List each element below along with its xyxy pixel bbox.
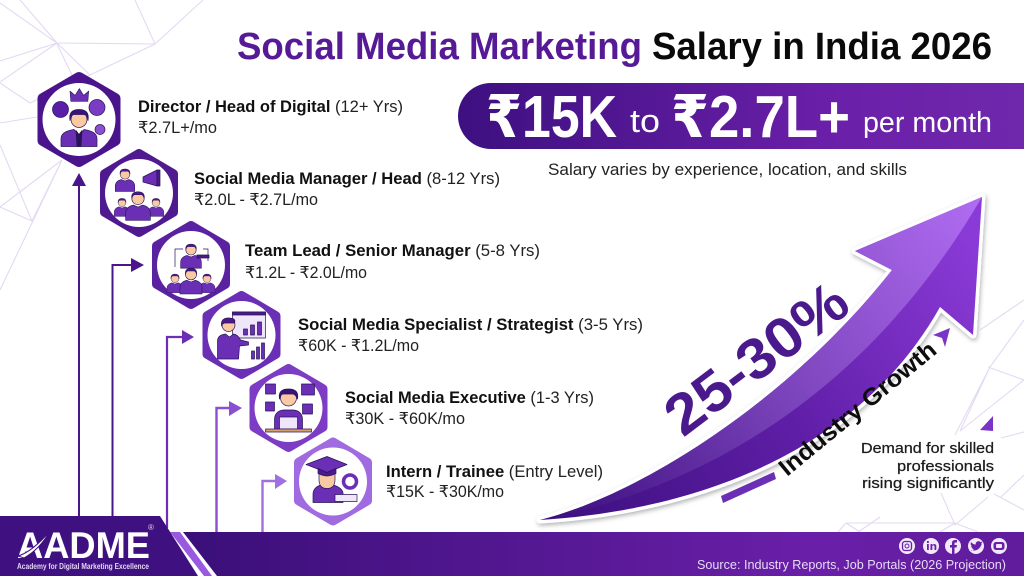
icon: small triangle — [933, 328, 950, 347]
hexagon badge — [42, 78, 116, 162]
hexagon badge — [299, 442, 367, 520]
role label: Social Media Executive (1-3 Yrs) — [345, 388, 594, 407]
hexagon badge — [208, 296, 276, 374]
hexagon badge — [254, 369, 322, 447]
salary: ₹30K - ₹60K/mo — [345, 410, 465, 428]
banner note: Salary varies by experience, location, and skills — [548, 160, 907, 179]
salary range banner: ₹15K — [486, 84, 617, 150]
role label: Intern / Trainee (Entry Level) — [386, 462, 603, 481]
title: Social Media Marketing — [237, 26, 642, 68]
logo: AADME — [17, 525, 150, 566]
salary: ₹1.2L - ₹2.0L/mo — [245, 264, 367, 282]
arrow: to director — [72, 173, 86, 517]
role label: Social Media Specialist / Strategist (3-5 Yrs) — [298, 315, 643, 334]
icon: corner triangle — [980, 416, 993, 431]
salary: ₹60K - ₹1.2L/mo — [298, 337, 419, 355]
tagline: Academy for Digital Marketing Excellence — [17, 561, 149, 571]
demand note: rising significantly — [862, 475, 995, 492]
hexagon badge — [157, 226, 225, 304]
salary range banner — [458, 83, 1024, 150]
footer band — [0, 516, 1024, 576]
big growth arrow — [540, 197, 982, 520]
icon: linkedin — [923, 538, 939, 554]
arrow: to executive — [262, 474, 287, 532]
light purple stripe — [170, 532, 212, 576]
icon: twitter — [968, 538, 984, 554]
panel: team lead — [157, 226, 540, 304]
demand note — [861, 440, 995, 492]
social icons — [899, 538, 1007, 554]
demand note: professionals — [897, 458, 994, 475]
title — [237, 26, 992, 68]
panel: specialist — [208, 296, 643, 374]
salary range banner: to — [630, 103, 660, 139]
panel: executive — [254, 369, 594, 447]
growth percentage: 25-30% — [652, 269, 861, 448]
icon: facebook — [945, 538, 961, 554]
panel: director — [42, 78, 403, 162]
industry growth label: Industry Growth — [774, 336, 942, 482]
hexagon badge — [105, 154, 173, 232]
salary range banner: per month — [863, 107, 992, 139]
arrow: to specialist — [216, 401, 242, 532]
role label: Director / Head of Digital (12+ Yrs) — [138, 97, 403, 116]
role label: Social Media Manager / Head (8-12 Yrs) — [194, 169, 500, 188]
salary: ₹2.0L - ₹2.7L/mo — [194, 191, 318, 209]
icon: youtube — [991, 538, 1007, 554]
industry growth label — [721, 336, 942, 503]
title: Salary in India 2026 — [652, 26, 992, 68]
salary range banner: ₹2.7L+ — [671, 84, 850, 150]
panel: intern — [299, 442, 603, 520]
demand note: Demand for skilled — [861, 440, 994, 457]
source note: Source: Industry Reports, Job Portals (2026 Projection) — [697, 558, 1006, 572]
role label: Team Lead / Senior Manager (5-8 Yrs) — [245, 241, 540, 260]
arrow: to manager — [112, 258, 144, 517]
panel: social media manager — [105, 154, 500, 232]
swoosh — [18, 531, 50, 558]
registered mark: ® — [148, 523, 154, 532]
logo panel — [0, 516, 198, 576]
icon: instagram — [899, 538, 915, 554]
accent dash — [721, 472, 776, 503]
salary: ₹15K - ₹30K/mo — [386, 483, 504, 501]
arrow: to team lead — [167, 330, 194, 528]
salary: ₹2.7L+/mo — [138, 119, 217, 137]
